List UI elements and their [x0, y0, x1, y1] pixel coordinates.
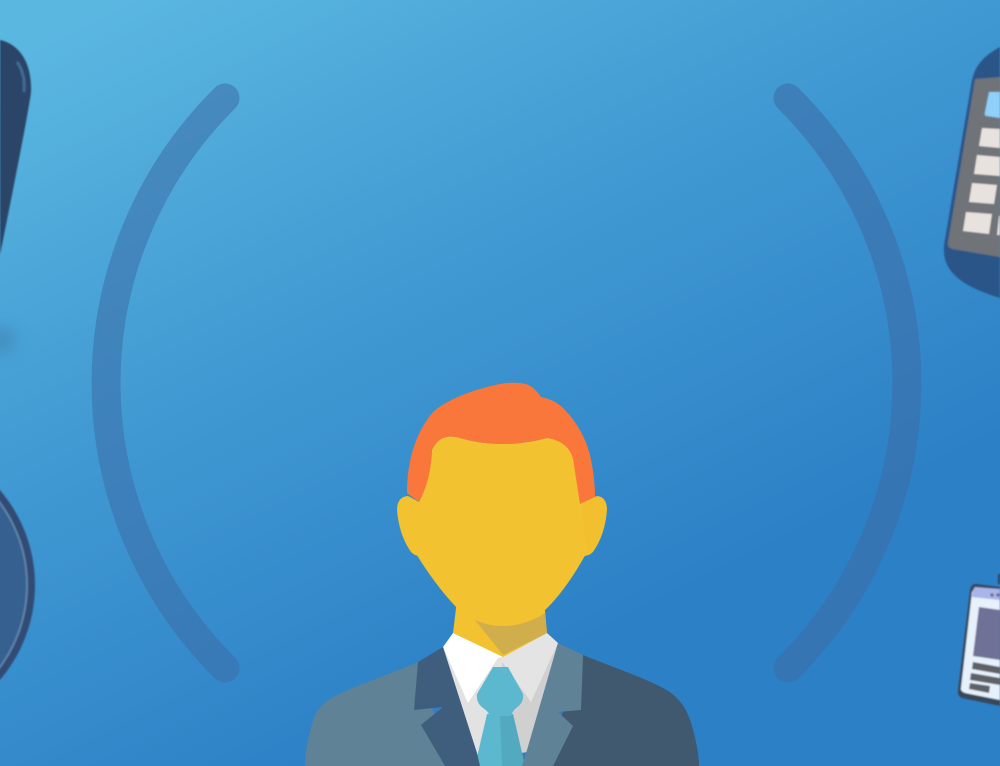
tablet screen [961, 588, 1000, 700]
left ear [397, 496, 422, 556]
calculator body [944, 47, 1000, 298]
tablet text lines [969, 662, 1000, 693]
right lapel [522, 643, 583, 766]
shirt underlay right [500, 643, 558, 757]
tie [475, 667, 525, 766]
face [415, 436, 587, 626]
shirt underlay left [443, 647, 503, 757]
right device: tablet [958, 574, 1000, 706]
left lapel [414, 647, 480, 766]
left device: phone edge [0, 40, 31, 255]
calculator face [948, 77, 1000, 257]
jacket right shoulder [545, 655, 699, 766]
shirt collar left [443, 633, 503, 703]
calculator screen [985, 92, 1000, 118]
jacket left shoulder [305, 662, 450, 766]
right ear [580, 496, 607, 556]
tablet header [972, 587, 1000, 600]
neck shadow [475, 613, 547, 655]
shirt collar right [500, 633, 558, 702]
person [305, 383, 699, 766]
calculator keys [963, 128, 1000, 235]
hair [407, 383, 595, 504]
neck [453, 600, 547, 658]
left device: round disc [0, 439, 35, 731]
tablet stub [998, 574, 1000, 584]
left bracket arc [106, 98, 225, 668]
tablet image block [973, 607, 1000, 660]
right device: calculator [944, 47, 1000, 298]
left blurred smudge [0, 326, 16, 354]
right bracket arc [788, 98, 907, 668]
tablet dots [990, 593, 994, 597]
tablet frame [958, 584, 1000, 706]
